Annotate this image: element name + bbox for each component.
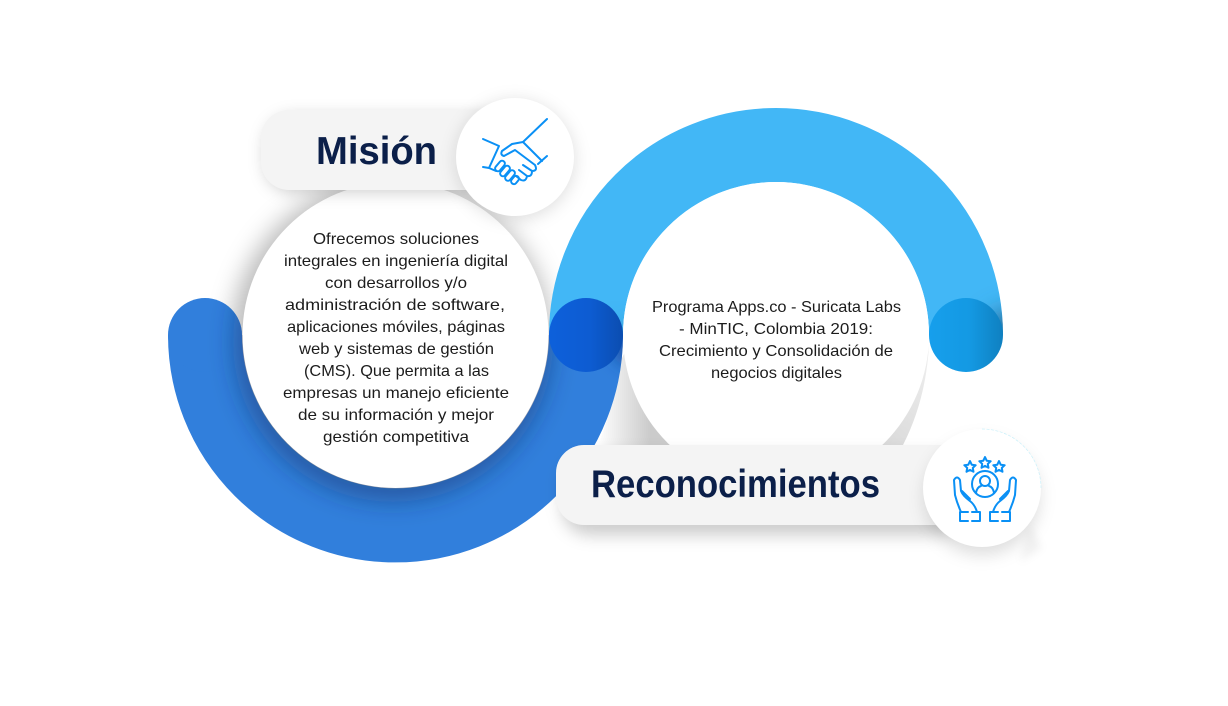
text: reconocimientos body (652, 299, 901, 382)
text: mision body: empresas un manejo eficiente (283, 385, 509, 402)
text: mision body: administración de software, (285, 297, 505, 314)
arc: right light blue ring (586, 145, 1042, 370)
panel: reconocimientos disc (623, 182, 929, 488)
text: mision body: (CMS). Que permita a las (304, 363, 489, 380)
heading: reconocimientos: Reconocimientos (591, 463, 880, 506)
text: reconocimientos body: negocios digitales (711, 365, 842, 382)
icon badge: hands with stars (923, 429, 1042, 562)
arc: left blue ring (168, 298, 623, 562)
text: mision body: gestión competitiva (323, 429, 469, 446)
text: mision body: web y sistemas de gestión (298, 341, 494, 358)
text: reconocimientos body: Crecimiento y Consolidación de (659, 343, 893, 360)
text: mision body: integrales en ingeniería digital (284, 253, 508, 270)
text: reconocimientos body: - MinTIC, Colombia 2019: (679, 321, 873, 338)
shadow: left disc on background (231, 180, 551, 500)
heading pill: mision (261, 110, 511, 192)
node: centre join circle (549, 298, 623, 372)
text: mision body (283, 231, 509, 446)
text: mision body: con desarrollos y/o (325, 275, 467, 292)
heading: mision: Misión (316, 130, 437, 173)
text: mision body: de su información y mejor (298, 407, 495, 424)
icon badge: handshake (455, 98, 575, 220)
shadow: right disc crescents (598, 345, 929, 445)
end cap: right ring (929, 298, 1003, 372)
panel: mision disc (242, 182, 548, 488)
text: mision body: Ofrecemos soluciones (313, 231, 479, 248)
text: reconocimientos body: Programa Apps.co - Suricata Labs (652, 299, 901, 316)
heading pill: reconocimientos (556, 445, 976, 535)
text: mision body: aplicaciones móviles, páginas (287, 319, 505, 336)
